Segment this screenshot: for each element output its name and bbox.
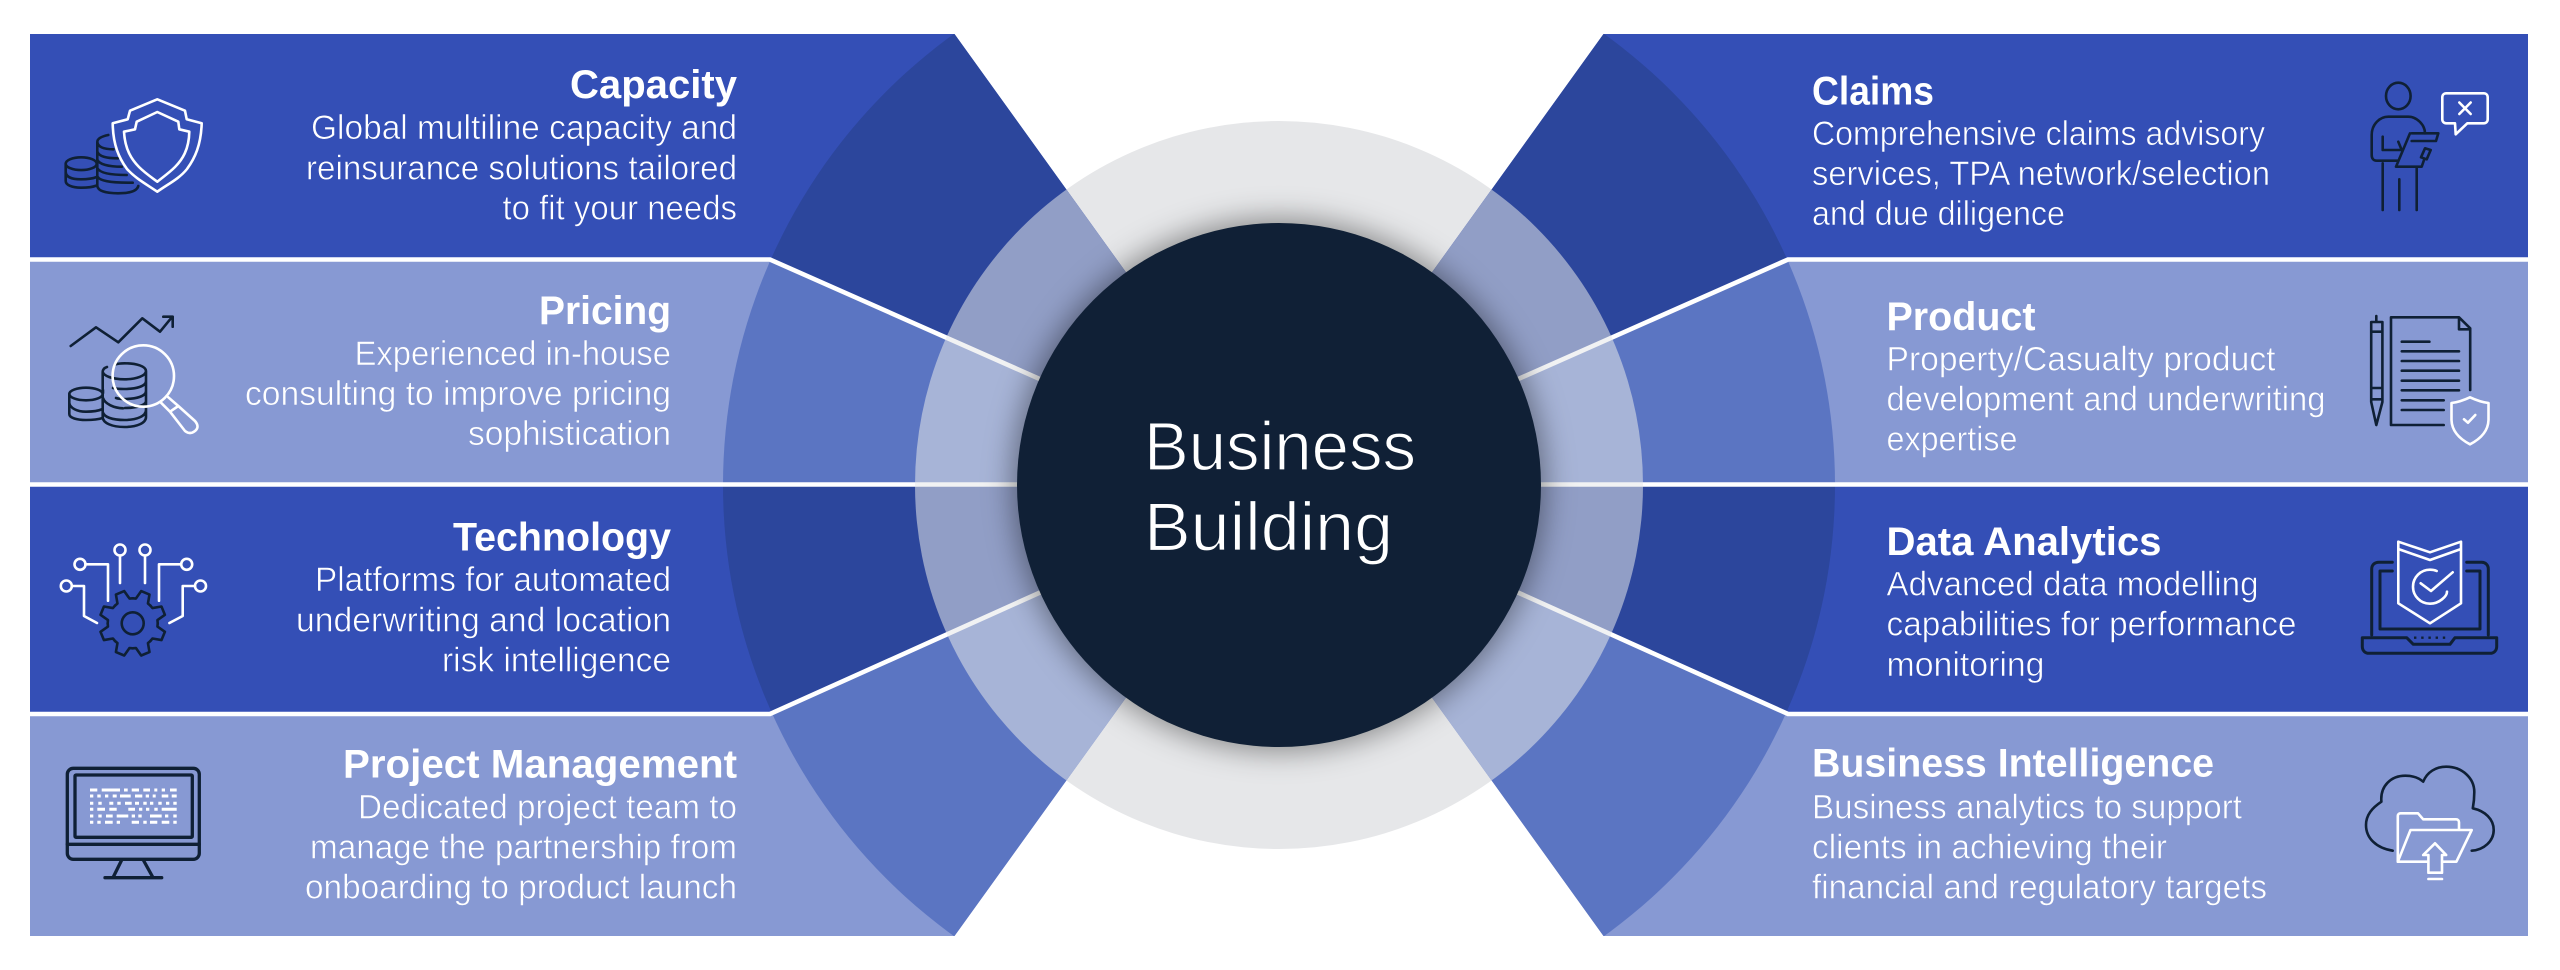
center label: Building xyxy=(1144,488,1393,566)
panel: project management xyxy=(30,594,1126,936)
text: project management description: manage the partnership from xyxy=(310,828,737,866)
text: data analytics description: Advanced data modelling xyxy=(1886,566,2258,604)
panel: capacity xyxy=(30,34,1126,377)
icon: chart, coins and magnifier xyxy=(69,317,198,433)
text: product description: expertise xyxy=(1886,421,2018,459)
text: data analytics description: monitoring xyxy=(1886,646,2044,684)
icon: person with clipboard and speech bubble xyxy=(2372,83,2488,210)
text: pricing description xyxy=(245,335,671,453)
center shadow xyxy=(1013,219,1545,751)
text: technology description: Platforms for automated xyxy=(315,561,671,599)
panel: claims xyxy=(1432,34,2528,377)
center circle xyxy=(1017,223,1541,747)
grey outer ring xyxy=(915,121,1643,849)
text: capacity description: to fit your needs xyxy=(502,190,737,228)
text: claims description: services, TPA network/selection xyxy=(1812,155,2270,193)
text: product description: development and underwriting xyxy=(1886,381,2326,419)
heading: business intelligence: Business Intelligence xyxy=(1812,742,2214,786)
heading: pricing: Pricing xyxy=(539,289,671,333)
panel: data analytics xyxy=(1518,486,2528,712)
panel: business intelligence xyxy=(1432,594,2528,936)
text: claims description: and due diligence xyxy=(1812,195,2065,233)
text: product description xyxy=(1886,341,2326,459)
panel: pricing xyxy=(30,262,1038,482)
panel: product xyxy=(1520,262,2528,482)
icon: computer monitor xyxy=(67,768,199,878)
text: business intelligence description xyxy=(1812,788,2267,906)
heading: technology: Technology xyxy=(453,516,672,560)
text: pricing description: sophistication xyxy=(468,415,671,453)
text: product description: Property/Casualty product xyxy=(1886,341,2276,379)
text: data analytics description xyxy=(1886,566,2296,684)
heading: claims: Claims xyxy=(1812,69,1934,113)
translucent inner ring over wedges xyxy=(915,190,1643,780)
text: business intelligence description: clients in achieving their xyxy=(1812,828,2167,866)
text: project management description xyxy=(305,788,737,906)
heading: capacity: Capacity xyxy=(570,63,738,107)
text: capacity description: Global multiline capacity and xyxy=(311,109,737,147)
text: business intelligence description: financial and regulatory targets xyxy=(1812,868,2267,906)
heading: project management: Project Management xyxy=(343,743,737,787)
panel: technology xyxy=(30,486,1040,712)
text: technology description: underwriting and location xyxy=(296,602,671,640)
text: pricing description: consulting to improve pricing xyxy=(245,375,671,413)
text: pricing description: Experienced in-house xyxy=(355,335,671,373)
text: project management description: Dedicated project team to xyxy=(358,788,737,826)
text: capacity description: reinsurance solutions tailored xyxy=(306,150,737,188)
text: claims description xyxy=(1812,115,2270,233)
heading: data analytics: Data Analytics xyxy=(1886,520,2162,564)
text: project management description: onboarding to product launch xyxy=(305,868,737,906)
text: claims description: Comprehensive claims advisory xyxy=(1812,115,2265,153)
dividers xyxy=(30,260,2528,714)
icon: cloud with folder upload xyxy=(2366,767,2494,879)
icon: laptop with shield check xyxy=(2362,542,2497,653)
text: technology description xyxy=(296,561,671,680)
center label: Business xyxy=(1144,408,1416,485)
heading: product: Product xyxy=(1886,295,2036,339)
text: technology description: risk intelligence xyxy=(442,642,671,680)
text: capacity description xyxy=(306,109,737,228)
icon: shield and coins xyxy=(66,99,202,193)
text: business intelligence description: Business analytics to support xyxy=(1812,788,2243,826)
icon: document, pencil and shield xyxy=(2371,316,2488,444)
center label xyxy=(1144,408,1416,566)
icon: gear and circuit xyxy=(61,544,206,657)
text: data analytics description: capabilities for performance xyxy=(1886,606,2296,644)
